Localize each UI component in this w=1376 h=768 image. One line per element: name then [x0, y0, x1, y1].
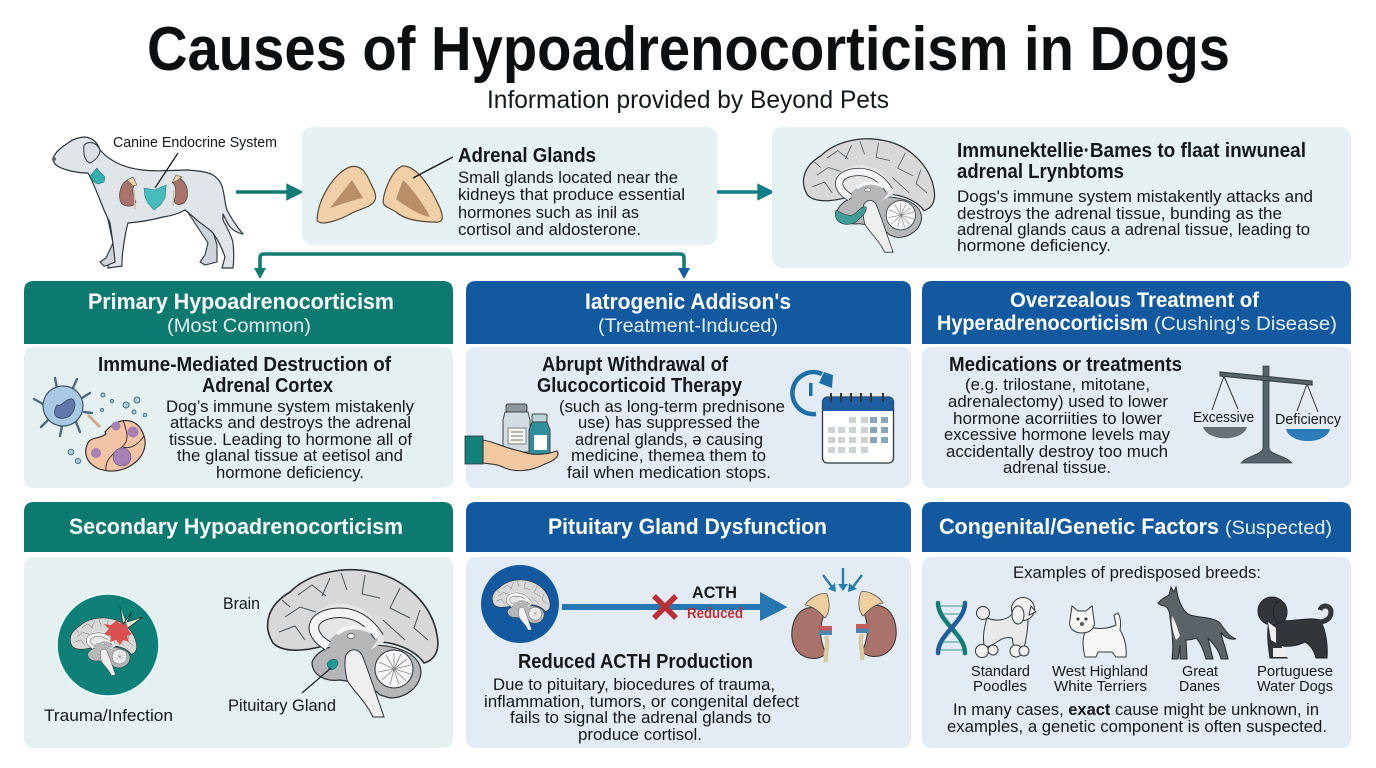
arrow: ACTH signal [562, 597, 781, 616]
panel: iatrogenic addison's [465, 281, 911, 488]
text: adrenal description [458, 169, 685, 239]
panel: immune attack summary [772, 127, 1351, 268]
labels: breed names: Water Dogs [1257, 678, 1333, 695]
icon: brain in circle [481, 565, 559, 643]
illustration: dog with endocrine system [52, 137, 243, 268]
text: immune-mediated description: hormone deficiency. [216, 463, 364, 482]
arrow: adrenal glands to immune panel [717, 186, 771, 198]
panel: overzealous treatment [922, 281, 1351, 488]
label: brain: Brain [223, 594, 260, 613]
text: genetic note: examples, a genetic component is often suspected. [947, 717, 1327, 736]
text: medications description: adrenalectomy) used to lower [948, 392, 1168, 411]
header: congenital: Congenital/Genetic Factors [939, 514, 1219, 539]
label: deficiency: Deficiency [1275, 412, 1342, 428]
icon: west highland white terrier [1070, 606, 1126, 657]
text: genetic note: In many cases, exact cause might be unknown, in [953, 700, 1319, 719]
panel: adrenal glands [302, 127, 717, 245]
icon: clock and calendar [792, 372, 894, 463]
labels: breed names: Great [1182, 663, 1219, 680]
text: immune description: Dogs's immune system mistakently attacks and [957, 187, 1313, 206]
icon: red cross [654, 596, 676, 618]
icon: thyroid [90, 168, 105, 184]
title: Causes of Hypoadrenocorticism in Dogs [147, 15, 1230, 84]
text: immune description: hormone deficiency. [957, 236, 1111, 255]
heading: immune-mediated destruction [98, 354, 391, 397]
text: immune-mediated description: attacks and destroys the adrenal [170, 413, 411, 432]
panel: congenital/genetic factors [922, 502, 1351, 748]
icon: pancreas organ [144, 185, 166, 210]
header: iatrogenic: Iatrogenic Addison's [585, 289, 791, 314]
text: immune-mediated description [166, 397, 415, 482]
header: overzealous: Overzealous Treatment of [1010, 288, 1260, 312]
header: secondary: Secondary Hypoadrenocorticism [69, 514, 403, 539]
heading: immune-mediated destruction: Immune-Mediated Destruction of [98, 354, 391, 376]
heading: abrupt withdrawal [537, 354, 743, 397]
labels: breed names: West Highland [1052, 663, 1148, 680]
icon: portuguese water dog [1258, 597, 1331, 658]
header: iatrogenic: (Treatment-Induced) [598, 316, 778, 337]
icon: balance scale [1193, 366, 1342, 463]
icon: DNA helix [938, 603, 965, 653]
label: excessive: Excessive [1193, 410, 1254, 426]
text: medications description: accidentally destroy too much [946, 442, 1168, 461]
header: primary: (Most Common) [167, 316, 311, 337]
icon: brain [803, 139, 935, 252]
header: primary [24, 281, 453, 344]
text: examples heading: Examples of predisposed breeds: [1013, 564, 1261, 582]
text: abrupt withdrawal description: adrenal glands, ə causing [575, 430, 763, 449]
label: reduced: Reduced [687, 606, 743, 622]
icon: right kidney [173, 178, 188, 204]
text: reduced ACTH description: Due to pituitary, biocedures of trauma, [493, 675, 775, 694]
labels: breed names: Danes [1179, 678, 1220, 695]
text: immune description: adrenal glands caus a adrenal tissue, leading to [957, 220, 1310, 239]
heading: immune-mediated destruction: Adrenal Cortex [202, 375, 333, 397]
icon: right adrenal gland [383, 166, 442, 222]
heading: medications or treatments: Medications or treatments [949, 354, 1182, 376]
header: congenital: (Suspected) [1225, 517, 1332, 539]
heading: immune summary [957, 140, 1306, 183]
panel: pituitary gland dysfunction [466, 502, 911, 748]
connector arrows: adrenal glands to categories [254, 254, 690, 279]
label: trauma/infection: Trauma/Infection [44, 706, 173, 725]
header: secondary [24, 502, 453, 552]
text: abrupt withdrawal description: medicine, themea them to [571, 446, 766, 465]
icon: standard poodle [976, 598, 1036, 658]
text: immune description: destroys the adrenal tissue, bunding as the [957, 204, 1282, 223]
text: reduced ACTH description: inflammation, tumors, or congenital defect [484, 692, 799, 711]
text: genetic note [947, 700, 1327, 736]
heading: abrupt withdrawal: Glucocorticoid Therapy [537, 375, 743, 397]
header: overzealous: (Cushing's Disease) [1154, 313, 1337, 335]
header: overzealous: Hyperadrenocorticism [937, 311, 1148, 335]
text: abrupt withdrawal description: use) has suppressed the [578, 413, 760, 432]
icon: left kidney [120, 180, 136, 206]
heading: immune summary: adrenal Lrynbtoms [957, 161, 1124, 183]
text: medications description [944, 375, 1171, 477]
heading: adrenal glands: Adrenal Glands [458, 145, 596, 167]
labels: breed names: Portuguese [1257, 663, 1333, 680]
icon: brain with pituitary gland [268, 570, 438, 717]
text: reduced ACTH description: produce cortisol. [578, 725, 702, 744]
text: immune-mediated description: the glanal tissue at eetisol and [177, 446, 403, 465]
text: immune description [957, 187, 1313, 255]
text: adrenal description: hormones such as inil as [458, 204, 639, 222]
text: adrenal description: Small glands located near the [458, 169, 678, 187]
labels: breed names: Poodles [973, 678, 1027, 695]
text: medications description: (e.g. trilostane, mitotane, [965, 375, 1150, 394]
label: ACTH: ACTH [692, 584, 737, 602]
header: pituitary dysfunction [466, 502, 911, 552]
header: pituitary dysfunction: Pituitary Gland Dysfunction [548, 514, 827, 539]
labels: breed names [971, 663, 1333, 695]
text: immune-mediated description: Dog’s immune system mistakenly [166, 397, 415, 416]
icon: kidneys with adrenal glands [792, 568, 896, 662]
label: pituitary gland: Pituitary Gland [228, 696, 336, 715]
icon: hand holding medicine [465, 404, 558, 471]
text: reduced ACTH description [484, 675, 799, 744]
header: congenital [922, 502, 1351, 552]
text: medications description: excessive hormone levels may [944, 425, 1171, 444]
label: canine endocrine system: Canine Endocrine System [113, 134, 277, 151]
text: reduced ACTH description: fails to signal the adrenal glands to [510, 708, 771, 727]
panel: primary hypoadrenocorticism [24, 281, 453, 488]
header: overzealous [922, 281, 1351, 344]
icon: left adrenal gland [317, 166, 376, 223]
text: immune-mediated description: tissue. Leading to hormone all of [169, 430, 412, 449]
heading: reduced ACTH production: Reduced ACTH Production [518, 651, 753, 673]
panel: secondary hypoadrenocorticism [24, 502, 453, 748]
labels: breed names: Standard [971, 663, 1030, 680]
text: adrenal description: kidneys that produce essential [458, 186, 685, 204]
text: abrupt withdrawal description [559, 397, 785, 482]
text: abrupt withdrawal description: fail when medication stops. [567, 463, 771, 482]
text: medications description: hormone acorriities to lower [953, 409, 1162, 428]
icon: great dane [1158, 587, 1236, 659]
text: abrupt withdrawal description: (such as long-term prednisone [559, 397, 785, 416]
heading: immune summary: Immunektellie·Bames to flaat inwuneal [957, 140, 1306, 162]
heading: abrupt withdrawal: Abrupt Withdrawal of [542, 354, 728, 376]
icon: immune cell attacking adrenal cell [34, 378, 147, 471]
header: iatrogenic [466, 281, 911, 344]
labels: breed names: White Terriers [1054, 678, 1147, 695]
icon: trauma brain [57, 594, 159, 696]
text: medications description: adrenal tissue. [1003, 458, 1111, 477]
header: primary: Primary Hypoadrenocorticism [88, 289, 394, 314]
arrow: dog to adrenal glands [236, 186, 300, 198]
text: adrenal description: cortisol and aldosterone. [458, 221, 641, 239]
subtitle: Information provided by Beyond Pets [487, 86, 889, 114]
